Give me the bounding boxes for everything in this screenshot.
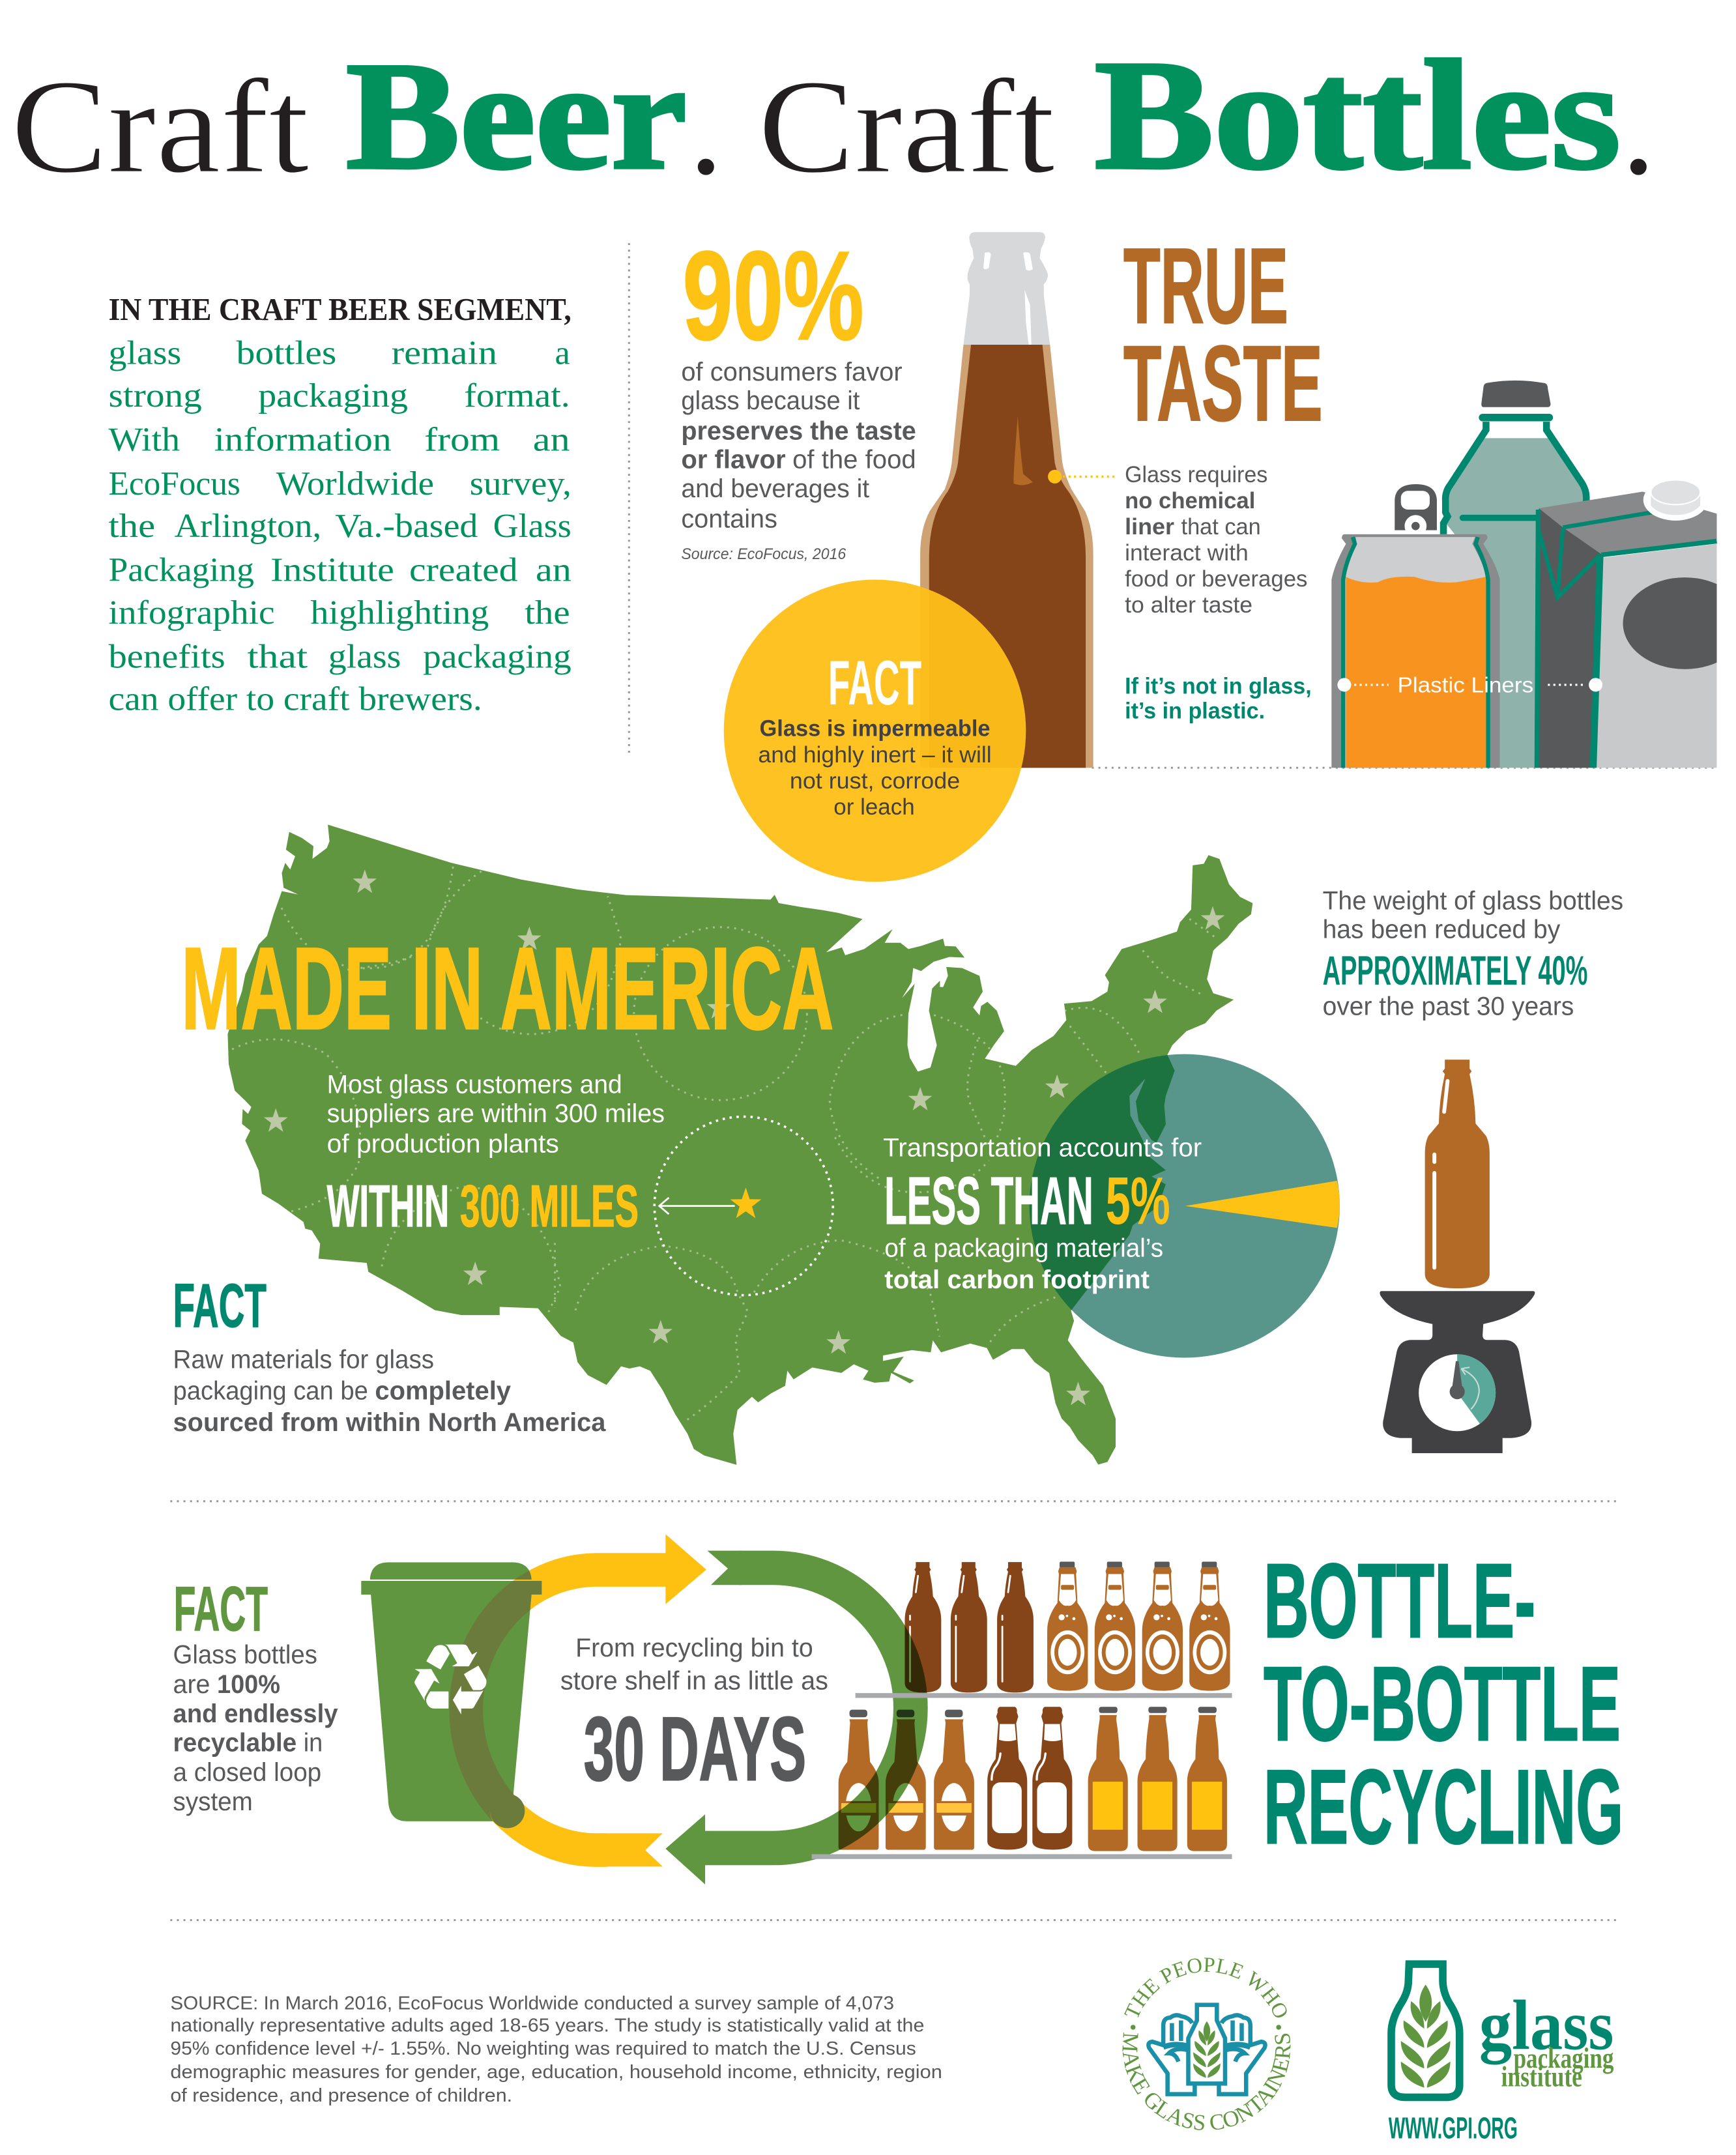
intro paragraph: Worldwide [276, 465, 434, 502]
90 percent stat: 90% [682, 225, 864, 367]
icon: recycling symbol: ♻ [406, 1622, 495, 1737]
title: . [1621, 51, 1656, 203]
300 mile radius ring [654, 1117, 833, 1295]
title [11, 28, 1656, 203]
source text: demographic measures for gender, age, education, household income, ethnicity, region [170, 2062, 942, 2083]
fact: recyclable: are [173, 1670, 210, 1699]
text: glass requires no chemical liner: no chemical [1125, 489, 1255, 513]
intro paragraph: can offer to craft brewers. [108, 681, 482, 718]
text: if it's not in glass: If it’s not in glass, [1125, 674, 1312, 699]
90 percent stat: preserves the taste [681, 416, 916, 445]
90 percent stat [681, 225, 916, 563]
callout: fact circle: or leach [833, 795, 915, 820]
fact: raw materials [173, 1271, 606, 1437]
text: within 300 miles: WITHIN [327, 1174, 449, 1239]
intro paragraph: With [108, 421, 180, 458]
text: transportation: total carbon footprint [884, 1266, 1150, 1294]
source text: of residence, and presence of children. [170, 2085, 512, 2106]
intro paragraph: highlighting [310, 594, 489, 631]
heading: true taste [1123, 225, 1323, 443]
fact: recyclable: in [304, 1728, 323, 1757]
text: within 300 miles: of production plants [327, 1129, 559, 1158]
callout: fact circle: not rust, corrode [790, 769, 960, 794]
intro paragraph: benefits [108, 638, 225, 675]
intro paragraph: an [533, 421, 570, 458]
intro paragraph: packaging [258, 377, 408, 414]
logo: glass packaging institute: institute [1501, 2061, 1582, 2093]
callout dot for no chemical liner [1048, 470, 1115, 484]
intro paragraph: a [555, 335, 570, 372]
title: Bottles [1095, 28, 1621, 201]
arrow: green recycling loop [665, 1551, 910, 1885]
text: transportation: LESS THAN [884, 1163, 1093, 1238]
text: weight reduced [1323, 886, 1623, 1021]
intro paragraph: Arlington, [175, 508, 321, 545]
shelves [812, 1693, 1232, 1859]
logo: people who make glass containers: THE PEOPLE WHO [1124, 1958, 1286, 2018]
heading: true taste: TRUE [1123, 225, 1288, 345]
90 percent stat: glass because it [681, 386, 860, 415]
intro paragraph: the [108, 508, 155, 545]
intro paragraph: Glass [493, 508, 571, 545]
arrow: yellow recycling loop top [466, 1534, 706, 1812]
heading: bottle-to-bottle recycling: BOTTLE- [1264, 1542, 1535, 1660]
arrow: yellow recycling loop bottom [490, 1794, 663, 1866]
heading: true taste: TASTE [1123, 323, 1323, 443]
text: glass requires no chemical liner: liner [1125, 515, 1174, 540]
heading: bottle-to-bottle recycling [1264, 1542, 1623, 1866]
icon: beverage can [1331, 534, 1499, 768]
intro paragraph: packaging [423, 638, 571, 675]
logo: glass packaging institute: WWW.GPI.ORG [1389, 2111, 1518, 2145]
text: within 300 miles: Most glass customers and [327, 1071, 622, 1099]
fact: recyclable: Glass bottles [173, 1640, 317, 1669]
intro paragraph: Va.-based [335, 508, 478, 545]
text: 30 days: From recycling bin to [575, 1634, 813, 1662]
intro paragraph: strong [108, 377, 202, 414]
fact: raw materials: completely [375, 1377, 512, 1406]
text: glass requires no chemical liner: Glass requires [1125, 463, 1267, 487]
intro paragraph: glass [108, 335, 181, 372]
intro paragraph: Packaging [108, 552, 254, 589]
fact: recyclable: system [173, 1787, 253, 1816]
logo: people who make glass containers: MAKE GLASS CONTAINERS [1122, 2032, 1291, 2130]
fact: recyclable [173, 1573, 338, 1816]
intro paragraph [108, 293, 571, 718]
90 percent stat: contains [681, 504, 777, 533]
title: . [689, 51, 723, 203]
intro paragraph: remain [392, 335, 497, 372]
title: Beer [346, 31, 687, 201]
source text [170, 1993, 942, 2106]
fact: recyclable: FACT [174, 1573, 268, 1644]
text: 30 days: 30 DAYS [584, 1699, 806, 1800]
chart: transport pie [1030, 1054, 1340, 1357]
icon: glass beer bottle [920, 232, 1093, 768]
fact: recyclable: 100% [217, 1670, 280, 1699]
intro paragraph: created [409, 552, 518, 589]
callout: fact circle [724, 579, 1026, 882]
icon: pull tab [1395, 484, 1437, 537]
plastic liners label [1337, 673, 1602, 697]
intro paragraph: bottles [237, 335, 336, 372]
intro paragraph: the [525, 594, 570, 631]
logo: people who make glass containers [1122, 1958, 1291, 2130]
intro paragraph: information [214, 421, 392, 458]
text: glass requires no chemical liner: food or beverages [1125, 567, 1307, 592]
icon: carton [1537, 480, 1736, 768]
text: glass requires no chemical liner: interact with [1125, 541, 1249, 566]
intro paragraph: infographic [108, 594, 275, 631]
plastic liners label: Plastic Liners [1397, 673, 1533, 697]
text: 30 days [560, 1634, 828, 1800]
fact: raw materials: Raw materials for glass [173, 1345, 434, 1374]
icon: plastic water bottle [1443, 381, 1586, 768]
intro paragraph: Institute [270, 552, 394, 589]
arrow and star [659, 1187, 761, 1218]
90 percent stat: of the food [792, 446, 916, 474]
text: within 300 miles: 300 MILES [460, 1174, 639, 1239]
90 percent stat: Source: EcoFocus, 2016 [681, 545, 846, 563]
text: if it's not in glass [1125, 674, 1312, 723]
text: if it's not in glass: it’s in plastic. [1125, 699, 1265, 723]
title: Craft [11, 51, 309, 201]
intro paragraph: from [424, 421, 500, 458]
text: weight reduced: over the past 30 years [1323, 992, 1574, 1021]
intro paragraph: an [536, 552, 571, 589]
intro paragraph: format. [464, 377, 570, 414]
text: glass requires no chemical liner: to alter taste [1125, 593, 1252, 618]
90 percent stat: and beverages it [681, 474, 869, 503]
text: within 300 miles: suppliers are within 300 miles [327, 1099, 665, 1128]
callout: fact circle: Glass is impermeable [760, 717, 991, 742]
fact: raw materials: sourced from within North America [173, 1408, 606, 1437]
intro paragraph: survey, [470, 465, 571, 502]
logo: glass packaging institute [1389, 1964, 1613, 2145]
callout: fact circle: and highly inert – it will [758, 743, 992, 768]
text: glass requires no chemical liner: that can [1181, 515, 1261, 540]
logo: glass packaging institute: packaging [1514, 2042, 1613, 2074]
logo: glass packaging institute: glass [1479, 1986, 1613, 2065]
90 percent stat: of consumers favor [681, 358, 903, 386]
icon: bottle on scale [1380, 1060, 1535, 1453]
text: 30 days: store shelf in as little as [560, 1666, 828, 1695]
fact: recyclable: recyclable [173, 1728, 297, 1757]
90 percent stat: or flavor [681, 446, 786, 474]
icon: recycling bin [361, 1563, 542, 1821]
bottles top shelf [904, 1561, 1230, 1692]
map: united states [227, 824, 1252, 1465]
text: transportation: Transportation accounts for [883, 1134, 1202, 1163]
fact: recyclable: and endlessly [173, 1699, 338, 1728]
fact: raw materials: packaging can be [173, 1377, 368, 1406]
fact: recyclable: a closed loop [173, 1758, 321, 1787]
source text: nationally representative adults aged 18-65 years. The study is statistically valid at the [170, 2015, 924, 2036]
source text: 95% confidence level +/- 1.55%. No weighting was required to match the U.S. Census [170, 2038, 916, 2059]
fact: raw materials: FACT [173, 1271, 267, 1340]
intro paragraph: IN THE CRAFT BEER SEGMENT, [108, 293, 571, 327]
callout: fact circle: FACT [828, 647, 921, 718]
title: Craft [758, 51, 1055, 201]
text: transportation [883, 1134, 1202, 1294]
text: within 300 miles [327, 1071, 665, 1239]
intro paragraph: EcoFocus [108, 465, 240, 502]
text: glass requires no chemical liner [1125, 463, 1307, 618]
bottles bottom shelf [839, 1707, 1227, 1851]
heading: made in america: MADE IN AMERICA [181, 923, 833, 1054]
source text: SOURCE: In March 2016, EcoFocus Worldwide conducted a survey sample of 4,073 [170, 1993, 894, 2014]
intro paragraph: that [247, 638, 308, 675]
text: transportation: of a packaging material’s [884, 1234, 1163, 1263]
text: weight reduced: The weight of glass bottles [1323, 886, 1623, 915]
intro paragraph: glass [328, 638, 401, 675]
text: weight reduced: has been reduced by [1323, 916, 1560, 944]
text: transportation: 5% [1106, 1163, 1170, 1238]
